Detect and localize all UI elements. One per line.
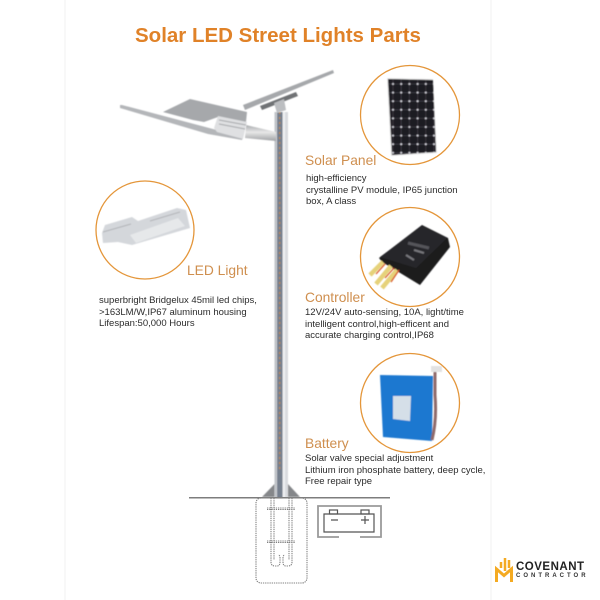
heading: Battery: Battery <box>305 436 349 451</box>
text: Controller: accurate charging control,IP68 <box>305 330 434 341</box>
foundation diagram <box>256 498 307 583</box>
text: LED Light <box>99 295 257 329</box>
ground line <box>189 497 390 498</box>
logo text: COVENANT <box>516 561 585 573</box>
solar panel on pole <box>243 70 334 113</box>
heading: Controller: Controller <box>305 290 365 305</box>
text: Solar Panel: crystalline PV module, IP65 junction <box>306 184 458 196</box>
logo text: CONTRACTOR <box>516 573 589 579</box>
title: Solar LED Street Lights Parts <box>135 24 421 47</box>
controller circle <box>360 208 460 306</box>
pole base <box>262 484 300 497</box>
heading: Solar Panel: Solar Panel <box>305 153 376 168</box>
LED lamp head <box>120 99 247 140</box>
battery circle <box>360 354 460 452</box>
heading: LED Light: LED Light <box>187 263 248 278</box>
text: LED Light: superbright Bridgelux 45mil led chips, <box>99 295 257 306</box>
street light pole <box>274 112 288 498</box>
logo mark <box>496 558 512 582</box>
pole arm <box>245 125 276 141</box>
text: Battery <box>305 453 485 487</box>
text: LED Light: Lifespan:50,000 Hours <box>99 318 195 329</box>
solar panel circle <box>360 66 460 164</box>
text: Controller <box>305 307 464 341</box>
text: Controller: intelligent control,high-efficent and <box>305 318 449 330</box>
text: LED Light: >163LM/W,IP67 aluminum housing <box>99 306 247 318</box>
text: Controller: 12V/24V auto-sensing, 10A, light/time <box>305 307 464 318</box>
text: Solar Panel <box>306 173 458 207</box>
logo text <box>516 561 589 579</box>
battery symbol <box>318 506 381 537</box>
text: Solar Panel: box, A class <box>306 196 356 207</box>
text: Battery: Free repair type <box>305 476 372 487</box>
text: Solar Panel: high-efficiency <box>306 173 367 184</box>
text: Battery: Solar valve special adjustment <box>305 453 433 464</box>
text: Battery: Lithium iron phosphate battery, deep cycle, <box>305 464 485 476</box>
LED light circle <box>96 181 194 279</box>
